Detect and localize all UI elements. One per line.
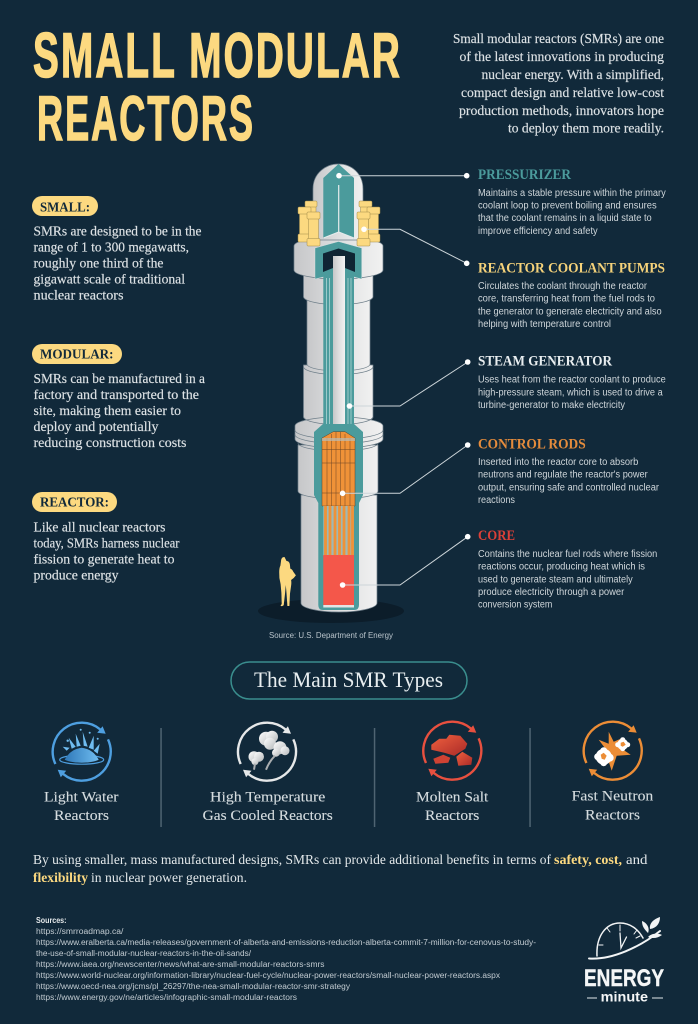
text: modular description: factory and transported to the (34, 387, 199, 402)
badge: small (32, 196, 98, 216)
person silhouette for scale (279, 557, 296, 606)
sources: https://www.iaea.org/newscenter/news/what-are-small-modular-reactors-smrs (36, 960, 324, 969)
callout: reactor coolant pumps: helping with temperature control (478, 319, 611, 330)
heading: the main smr types (231, 662, 467, 699)
icon: gas clouds (238, 723, 296, 781)
text: modular description: SMRs can be manufactured in a (34, 371, 205, 386)
source note: Source: U.S. Department of Energy (269, 631, 393, 640)
title (33, 21, 402, 154)
heading: the main smr types: The Main SMR Types (254, 667, 443, 692)
type: fast neutron reactors (572, 722, 654, 823)
callout: core: Contains the nuclear fuel rods where fission (478, 549, 657, 560)
closing statement: safety, cost, (554, 852, 622, 867)
label: Fast Neutron (572, 789, 654, 805)
sources (36, 916, 536, 1002)
teal coolant housing (315, 242, 362, 279)
text: modular description: site, making them easier to (34, 403, 181, 418)
sources: https://smrroadmap.ca/ (36, 927, 124, 936)
callout: pressurizer: PRESSURIZER (478, 167, 571, 183)
text: small description (34, 224, 202, 302)
sources: https://www.oecd-nea.org/jcms/pl_26297/the-nea-small-modular-reactor-smr-strategy (36, 982, 350, 991)
callout: reactor coolant pumps: Circulates the coolant through the reactor (478, 281, 648, 292)
icon: neutron burst (584, 722, 642, 780)
badge: small: SMALL: (40, 200, 90, 216)
middle cylinder (298, 445, 378, 499)
panel: reactor (32, 492, 180, 582)
panel: modular (32, 344, 205, 450)
callout: core: conversion system (478, 600, 552, 611)
text: reactor description: Like all nuclear reactors (34, 520, 166, 534)
callout: control rods: neutrons and regulate the reactor's power (478, 470, 648, 481)
callout: reactor coolant pumps: REACTOR COOLANT PUMPS (478, 260, 665, 276)
sources: the-use-of-small-modular-nuclear-reactors-in-the-oil-sands/ (36, 949, 252, 958)
callout: reactor coolant pumps (478, 260, 665, 330)
intro text: nuclear energy. With a simplified, (482, 67, 664, 82)
sources: https://www.world-nuclear.org/information-library/nuclear-fuel-cycle/nuclear-power-reactors/small-nuclear-power-reactors.aspx (36, 971, 500, 980)
label: Light Water (44, 790, 118, 806)
upper flange (294, 237, 383, 279)
text: small description: range of 1 to 300 megawatts, (34, 240, 189, 254)
callout: control rods: CONTROL RODS (478, 436, 586, 452)
divider 2 (374, 728, 375, 827)
divider 3 (529, 728, 531, 827)
text: reactor description: fission to generate heat to (34, 552, 175, 566)
dome (313, 164, 363, 240)
text: reactor description (34, 520, 180, 582)
callout: core (478, 528, 657, 611)
label (203, 790, 333, 824)
connector lines (339, 176, 468, 585)
text: small description: gigawatt scale of traditional (34, 272, 185, 286)
title: SMALL MODULAR (33, 21, 402, 91)
callout: control rods (478, 436, 660, 506)
label (416, 790, 489, 824)
lower flange rings (295, 417, 383, 451)
text: modular description (34, 371, 205, 450)
central column (333, 256, 345, 432)
callout: steam generator: Uses heat from the reactor coolant to produce (478, 375, 666, 386)
label: High Temperature (210, 790, 326, 806)
label: Reactors (54, 808, 109, 824)
closing statement: in nuclear power generation. (91, 870, 247, 885)
pressurizer teal cavity (323, 164, 354, 238)
text: reactor description: today, SMRs harness nuclear (34, 536, 180, 550)
label: Reactors (425, 808, 479, 824)
label: Molten Salt (416, 790, 489, 806)
callout: control rods: Inserted into the reactor core to absorb (478, 457, 639, 468)
label: Gas Cooled Reactors (203, 808, 333, 824)
callout: core: CORE (478, 528, 515, 544)
callout: pressurizer: coolant loop to prevent boiling and ensures (478, 201, 657, 212)
callout: pressurizer: improve efficiency and safety (478, 226, 598, 237)
lower cylinder (301, 495, 377, 612)
callout: steam generator: turbine-generator to make electricity (478, 400, 625, 411)
closing statement: flexibility (33, 870, 88, 885)
text: small description: roughly one third of the (34, 256, 164, 270)
reactor diagram (258, 164, 404, 623)
callout: core: produce electricity through a power (478, 587, 625, 598)
text: small description: SMRs are designed to be in the (34, 224, 202, 238)
label (572, 789, 654, 823)
callout: pressurizer (478, 167, 666, 237)
closing statement: and (626, 852, 648, 867)
callout: reactor coolant pumps: the generator to generate electricity and also (478, 306, 662, 317)
control rods lower (323, 506, 354, 556)
yellow pumps (298, 201, 380, 246)
intro text: Small modular reactors (SMRs) are one (453, 31, 664, 46)
vessel (314, 424, 363, 610)
icon: clock and leaves (589, 917, 662, 959)
icon: salt rocks (423, 722, 481, 780)
logo: energy minute (584, 917, 664, 1004)
callout: reactor coolant pumps: core, transferring heat from the fuel rods to (478, 294, 656, 305)
callout: steam generator: STEAM GENERATOR (478, 354, 612, 370)
sources: https://www.energy.gov/ne/articles/infographic-small-modular-reactors (36, 993, 297, 1002)
callout: pressurizer: Maintains a stable pressure within the primary (478, 188, 666, 199)
wordmark: ENERGY (584, 965, 664, 992)
coolant channels (323, 276, 333, 432)
callout: control rods: reactions (478, 495, 515, 506)
icon: water splash (53, 723, 111, 781)
type: molten salt reactors (416, 722, 489, 824)
intro text: compact design and relative low-cost (461, 85, 664, 100)
badge: modular (32, 344, 122, 364)
closing statement: By using smaller, mass manufactured designs, SMRs can provide additional benefits in terms of (33, 852, 551, 867)
divider 1 (160, 728, 162, 827)
sources: https://www.eralberta.ca/media-releases/government-of-alberta-and-emissions-reduction-alberta-commit-7-million-for-cenovus-to-study- (36, 938, 536, 947)
callout: steam generator (478, 354, 666, 411)
panel: small (32, 196, 202, 302)
upper column segments (304, 365, 373, 425)
callout: control rods: output, ensuring safe and controlled nuclear (478, 482, 660, 493)
callout: steam generator: high-pressure steam, which is used to drive a (478, 387, 663, 398)
sources: Sources: (36, 916, 66, 925)
text: small description: nuclear reactors (34, 288, 124, 302)
callout: core: reactions occur, producing heat which is (478, 562, 645, 573)
text: modular description: reducing construction costs (34, 435, 186, 450)
badge: reactor (32, 492, 117, 512)
connector dots (336, 173, 471, 588)
label (44, 790, 118, 824)
type: high temperature gas cooled reactors (203, 723, 333, 824)
closing statement (33, 852, 648, 885)
label: Reactors (585, 807, 640, 823)
intro text: production methods, innovators hope (459, 103, 664, 118)
logo: energy minute: minute (601, 988, 648, 1004)
title: REACTORS (37, 84, 255, 154)
callout: core: used to generate steam and ultimately (478, 574, 633, 585)
ground shadow (258, 599, 404, 623)
callout: pressurizer: that the coolant remains in a liquid state to (478, 213, 652, 224)
text: reactor description: produce energy (34, 568, 119, 582)
core fuel (323, 555, 354, 605)
badge: reactor: REACTOR: (40, 496, 109, 510)
text: modular description: deploy and potentially (34, 419, 159, 434)
intro text: of the latest innovations in producing (460, 49, 664, 64)
type: light water reactors (44, 723, 118, 824)
control rods upper block (322, 432, 355, 506)
intro text: to deploy them more readily. (508, 120, 664, 136)
intro text (453, 31, 664, 136)
badge: modular: MODULAR: (40, 348, 114, 362)
